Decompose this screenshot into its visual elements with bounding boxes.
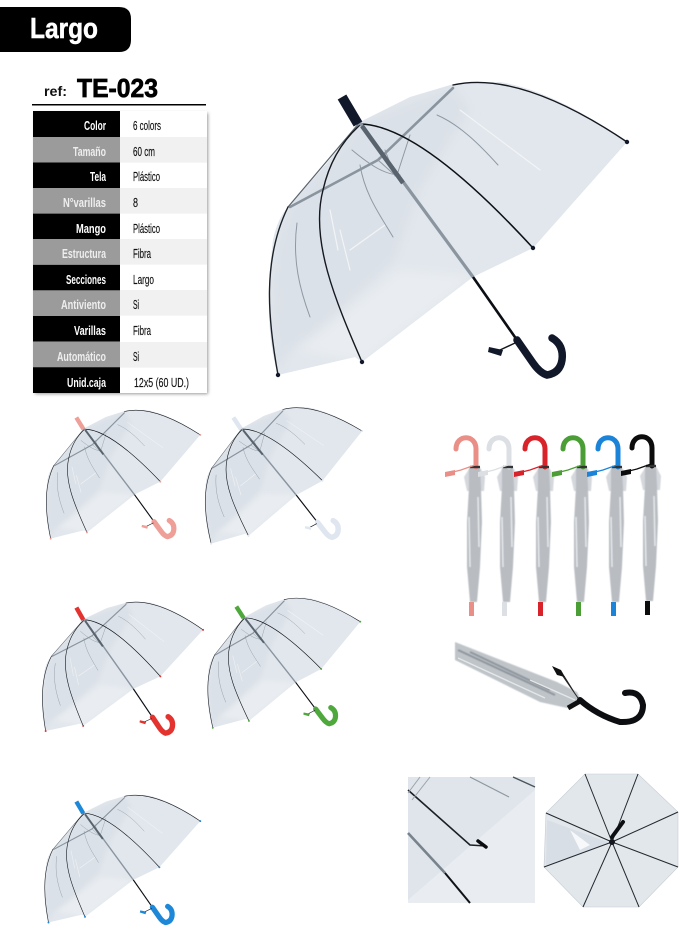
specification table: Unid.caja [67,375,107,390]
top view of open umbrella [544,774,678,907]
specification table: Mango [76,221,106,236]
blue umbrella [44,795,201,923]
specification table: Varillas [74,323,106,338]
specification table: 12x5 (60 UD.) [134,376,189,390]
specification table: Estructura [62,246,107,261]
specification table: Tela [90,169,106,184]
specification table: Largo [133,273,154,287]
specification table: Plástico [133,222,160,236]
specification table: Fibra [133,324,151,338]
green umbrella [204,596,365,729]
specification table: Plástico [133,170,160,184]
white umbrella [200,404,369,545]
specification table: Si [133,350,139,364]
close-up photo: rib tip on canopy [408,777,535,903]
specification table: 60 cm [133,145,155,159]
specification table: 6 colors [133,119,161,133]
main photo: black open umbrella [269,82,629,377]
specification table: Antiviento [61,297,106,312]
specification table: Secciones [66,272,106,287]
specification table: 8 [133,196,138,210]
specification table: Fibra [133,247,151,261]
title banner: Largo: Largo [30,13,98,45]
title banner: Largo [0,7,131,52]
close-up photo: closed umbrella handle [455,642,643,722]
closed umbrellas in six colours [445,437,661,616]
reference heading: TE-023: TE-023 [77,73,158,103]
specification table: Color [84,118,106,133]
reference heading: TE-023: ref: [44,83,67,99]
red umbrella [42,600,205,735]
pink umbrella [44,409,203,540]
specification table: Tamaño [73,144,106,159]
specification table: Si [133,298,139,312]
reference heading: TE-023 [32,73,206,106]
specification table [33,111,208,394]
specification table: N°varillas [63,195,106,210]
specification table: Automático [57,349,106,364]
